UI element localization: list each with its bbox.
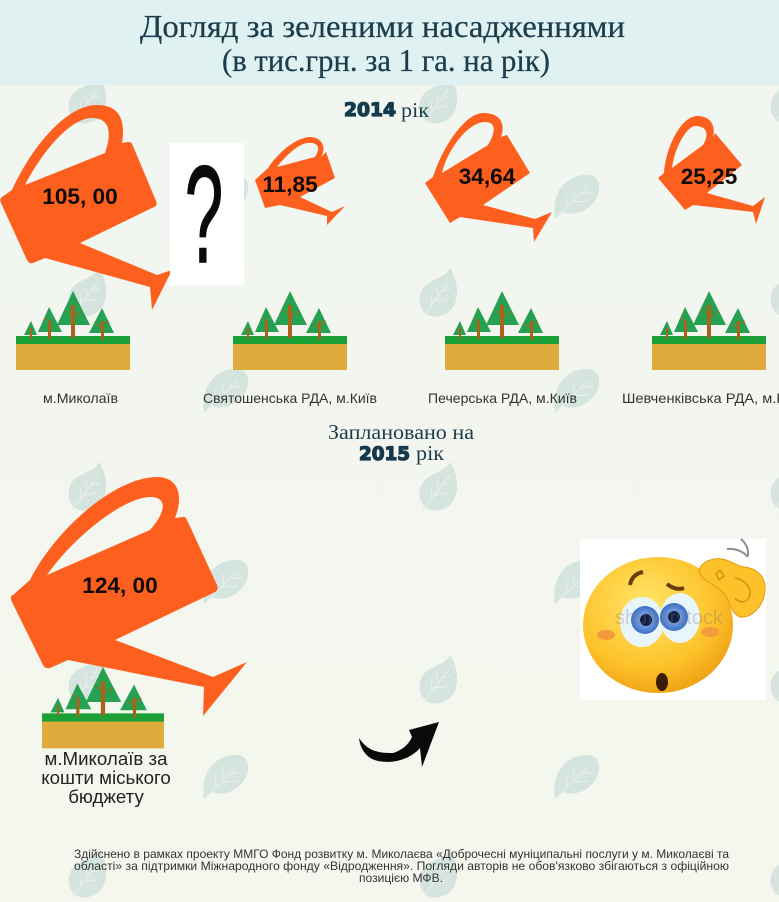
heading: planned 2015 [328, 420, 475, 465]
footer note: області» за підтримки Міжнародного фонду «Відродження». Погляди авторів не обов'язково збігаються з офіційною [74, 859, 729, 873]
label: Святошенська РДА, м.Київ [203, 390, 377, 406]
heading: planned 2015: рік [416, 441, 445, 465]
title [140, 8, 625, 78]
title: (в тис.грн. за 1 га. на рік) [222, 42, 550, 78]
label: м.Миколаїв за [45, 748, 168, 769]
value 34,64: 34,64 [459, 164, 516, 189]
heading: planned 2015: Заплановано на [328, 420, 475, 444]
footer note [74, 847, 729, 885]
icon: watering can 34,64 [425, 113, 552, 242]
panel: Shevchenkivskyi 2014 [622, 116, 779, 406]
panel: Sviatoshynskyi 2014 [203, 137, 377, 406]
icon: trees [233, 291, 347, 370]
value 25,25: 25,25 [681, 164, 737, 189]
heading: 2014: рік [401, 98, 430, 122]
heading: 2014 [344, 98, 430, 122]
icon: watering can 25,25 [658, 116, 765, 224]
heading: 2014: 2014 [344, 99, 396, 121]
arrow [359, 722, 439, 767]
icon: watering can 124,00 [11, 477, 247, 716]
question mark image: ? [185, 138, 223, 292]
footer note: позицією МФВ. [359, 871, 443, 885]
title: Догляд за зеленими насадженнями [140, 8, 625, 44]
icon: watering can 105,00 [0, 105, 172, 310]
label: бюджету [68, 786, 144, 807]
icon: confused emoji [580, 539, 766, 700]
label [41, 748, 171, 807]
question mark image [170, 138, 244, 292]
footer note: Здійснено в рамках проекту ММГО Фонд розвитку м. Миколаєва «Доброчесні муніципальні послуги у м. Миколаєві та [74, 847, 729, 861]
panel: Mykolaiv 2014 [0, 105, 244, 406]
panel: Pecherskyi 2014 [425, 113, 577, 406]
panel: Mykolaiv 2015 [11, 477, 247, 807]
header band [0, 0, 779, 85]
icon: trees [652, 291, 766, 370]
label: кошти міського [41, 767, 171, 788]
label: Печерська РДА, м.Київ [428, 390, 577, 406]
icon: trees [42, 667, 164, 748]
value 124,00: 124, 00 [82, 573, 158, 598]
icon: confused emoji: shutterstock [615, 607, 724, 629]
heading: planned 2015: 2015 [359, 443, 410, 465]
value 105,00: 105, 00 [42, 184, 118, 209]
icon: watering can 11,85 [255, 137, 345, 225]
icon: trees [445, 291, 559, 370]
label: м.Миколаїв [43, 390, 118, 406]
icon: trees [16, 291, 130, 370]
value 11,85: 11,85 [262, 172, 318, 197]
